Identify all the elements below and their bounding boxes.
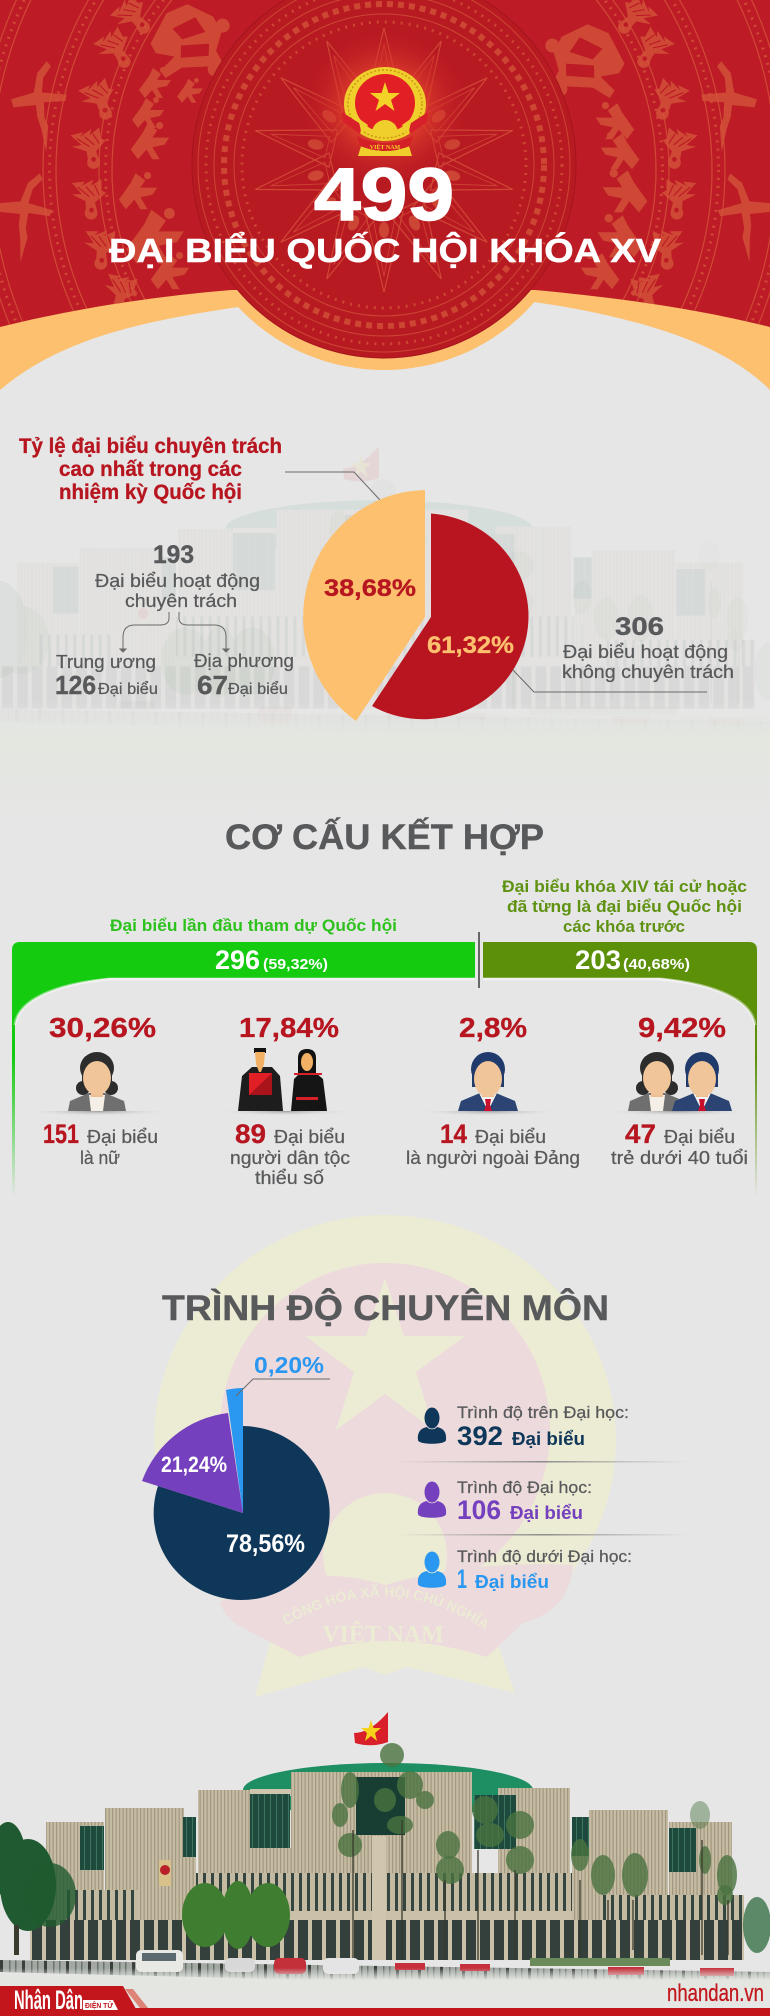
text: central delegates: Trung ương xyxy=(56,652,156,672)
bar value right: 203 xyxy=(575,945,621,975)
callout 0,20% xyxy=(236,1352,330,1396)
bar value right xyxy=(575,945,690,975)
text: 193 full-time delegates: Đại biểu hoạt động xyxy=(95,571,260,591)
stat: ethnic minorities: thiểu số xyxy=(255,1168,324,1188)
panel: faded national emblem backdrop: VIỆT NAM xyxy=(322,1622,444,1648)
pie chart: qualifications: 21,24% xyxy=(161,1452,227,1477)
legend: below university: Trình độ dưới Đại học: xyxy=(457,1547,632,1566)
inner frame highlight xyxy=(15,979,755,1025)
red callout heading: nhiệm kỳ Quốc hội xyxy=(59,481,242,504)
legend: above university xyxy=(418,1403,629,1451)
legend: university: Trình độ Đại học: xyxy=(457,1478,592,1497)
pie chart: full-time share: 38,68% xyxy=(324,575,416,602)
stat: non-party: 2,8% xyxy=(459,1012,527,1043)
olive label: returning delegates: Đại biểu khóa XIV tái cử hoặc xyxy=(502,877,747,896)
emblem glow xyxy=(300,28,470,188)
stat: non-party: Đại biểu xyxy=(475,1127,546,1147)
stat: ethnic minorities: 17,84% xyxy=(239,1012,339,1043)
center divider xyxy=(478,932,480,988)
header panel xyxy=(0,0,770,390)
section heading: CƠ CẤU KẾT HỢP xyxy=(225,817,544,857)
big number 499: 499 xyxy=(314,153,454,236)
text: 306 part-time delegates: 306 xyxy=(615,613,664,641)
orange medallion underlay xyxy=(187,0,581,370)
icon: navy person xyxy=(418,1408,446,1444)
red band xyxy=(0,2008,770,2016)
green label: first-time delegates: Đại biểu lần đầu tham dự Quốc hội xyxy=(110,916,397,935)
stat: ethnic minorities: Đại biểu xyxy=(274,1127,345,1147)
text: local delegates: 67 xyxy=(197,670,228,700)
text: central delegates: 126 xyxy=(55,670,96,700)
icon: purple person xyxy=(418,1482,446,1518)
pie chart: qualifications xyxy=(142,1388,330,1600)
lawn fading into page xyxy=(0,1968,770,2008)
logo tag: ĐIỆN TỬ xyxy=(85,2001,114,2010)
logo tab xyxy=(0,1986,140,2016)
bar value right: (40,68%) xyxy=(623,956,690,973)
stat: ethnic minorities: 89 xyxy=(235,1119,266,1149)
bar value left: 296 xyxy=(215,945,260,975)
red callout heading: Tỷ lệ đại biểu chuyên trách xyxy=(19,435,282,458)
callout leader line xyxy=(285,472,380,500)
text: central delegates xyxy=(55,652,158,700)
national emblem: VIỆT NAM xyxy=(370,143,401,151)
panel: faded parliament backdrop xyxy=(0,446,770,743)
stat: under 40: 47 xyxy=(625,1119,656,1149)
central drum medallion xyxy=(192,0,576,358)
legend: below university xyxy=(418,1547,632,1594)
legend: below university: Đại biểu xyxy=(475,1572,549,1592)
panel: faded national emblem backdrop xyxy=(154,1215,616,1697)
stripe accent xyxy=(125,1989,148,2008)
stat: women: Đại biểu xyxy=(87,1127,158,1147)
text: local delegates: Đại biểu xyxy=(228,681,288,698)
legend: below university: 1 xyxy=(457,1564,467,1594)
red drum background xyxy=(0,0,770,327)
stat: ethnic minorities: người dân tộc xyxy=(230,1148,350,1168)
legend: university xyxy=(418,1478,592,1525)
olive label: returning delegates xyxy=(502,877,747,936)
pie chart: qualifications: 78,56% xyxy=(226,1530,305,1558)
stat: ethnic minorities xyxy=(216,1012,354,1188)
stat: non-party: là người ngoài Đảng xyxy=(406,1148,580,1168)
bar value left: (59,32%) xyxy=(263,956,328,973)
olive label: returning delegates: đã từng là đại biểu Quốc hội xyxy=(507,897,742,916)
footer xyxy=(0,1980,770,2016)
legend: university: Đại biểu xyxy=(510,1503,583,1523)
text: local delegates xyxy=(194,651,294,700)
text: central delegates: Đại biểu xyxy=(98,681,158,698)
pie chart: full-time share xyxy=(303,490,528,721)
callout 0,20%: 0,20% xyxy=(254,1352,324,1378)
section heading: TRÌNH ĐỘ CHUYÊN MÔN xyxy=(162,1288,609,1328)
text: 306 part-time delegates xyxy=(562,613,734,682)
stat: women: 30,26% xyxy=(49,1012,156,1043)
national emblem xyxy=(342,67,428,156)
stat: non-party: 14 xyxy=(440,1119,467,1149)
lawn haze xyxy=(0,700,770,820)
stat: women: là nữ xyxy=(80,1148,120,1168)
red callout heading xyxy=(19,435,282,504)
legend: university: 106 xyxy=(457,1495,501,1525)
green frame left xyxy=(12,942,475,1197)
red callout heading: cao nhất trong các xyxy=(59,458,242,481)
stat: under 40: Đại biểu xyxy=(664,1127,735,1147)
stat: under 40: trẻ dưới 40 tuổi xyxy=(611,1148,748,1168)
olive frame right xyxy=(483,942,757,1197)
arrows: split central and local xyxy=(120,612,229,652)
legend: above university: 392 xyxy=(457,1421,503,1451)
pie chart: full-time share: 61,32% xyxy=(427,632,514,659)
header title: ĐẠI BIỂU QUỐC HỘI KHÓA XV xyxy=(109,231,661,269)
text: local delegates: Địa phương xyxy=(194,651,294,671)
part-time leader line xyxy=(513,670,707,692)
text: 193 full-time delegates: 193 xyxy=(153,541,194,569)
legend: above university: Đại biểu xyxy=(512,1429,585,1449)
stat: women: 151 xyxy=(43,1119,79,1149)
text: 306 part-time delegates: không chuyên trách xyxy=(562,662,734,682)
text: 193 full-time delegates xyxy=(95,541,260,611)
olive label: returning delegates: các khóa trước xyxy=(563,917,685,936)
parliament building illustration xyxy=(0,1712,770,1992)
stat: women xyxy=(25,1012,170,1168)
bar value left xyxy=(215,945,328,975)
panel: full-time delegates xyxy=(19,435,734,721)
panel: qualifications xyxy=(142,1288,688,1600)
panel: combined structure xyxy=(12,817,757,1197)
panel: faded national emblem backdrop: CÔNG HÒA XÃ HỘI CHỦ NGHĨA xyxy=(283,1584,487,1630)
icon: blue person xyxy=(418,1552,446,1588)
icon: ethnic costume couple xyxy=(238,1048,327,1111)
orange ribbon xyxy=(0,280,770,390)
legend: above university: Trình độ trên Đại học: xyxy=(457,1403,629,1422)
logo wordmark: Nhân Dân xyxy=(14,1985,83,2015)
text: 306 part-time delegates: Đại biểu hoạt động xyxy=(563,642,728,662)
stat: under 40 xyxy=(604,1012,751,1168)
stat: under 40: 9,42% xyxy=(638,1012,726,1043)
text: 193 full-time delegates: chuyên trách xyxy=(125,591,237,611)
stat: non-party xyxy=(406,1012,580,1168)
